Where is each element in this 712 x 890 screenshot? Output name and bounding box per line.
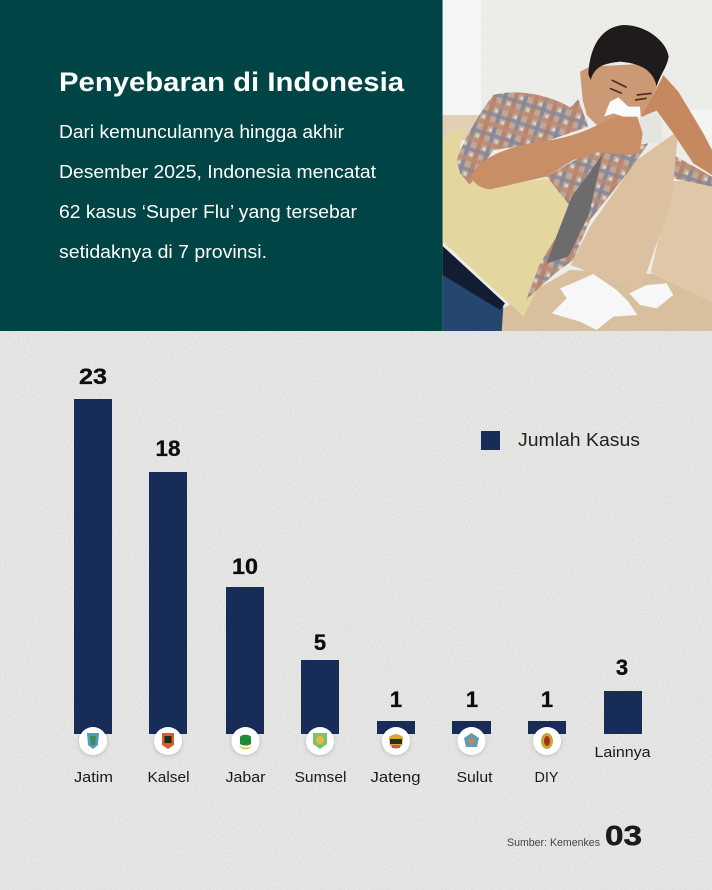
province emblem: Jatim [79, 727, 107, 755]
shirt right side [673, 155, 712, 187]
tissues on sofa [552, 274, 673, 330]
category labels: Lainnya [594, 744, 651, 761]
value labels: 23 [79, 364, 107, 389]
province emblem: DIY [533, 727, 561, 755]
bar chart [74, 364, 651, 786]
value labels: 1 [466, 687, 478, 712]
intro text: Desember 2025, Indonesia mencatat [59, 162, 376, 182]
tissue in hand [604, 97, 641, 117]
bar: Lainnya [604, 691, 642, 734]
legend: Jumlah Kasus [518, 430, 640, 450]
heading: Penyebaran di Indonesia [59, 67, 404, 97]
grey t-shirt [547, 154, 603, 263]
hair [588, 25, 669, 87]
bar: Jatim [74, 399, 112, 734]
province emblem: Jabar [232, 727, 260, 755]
bar: Kalsel [149, 472, 187, 734]
bar: Sulut [452, 721, 491, 734]
panel: header [0, 0, 443, 331]
bar: Jateng [377, 721, 415, 734]
category labels [74, 744, 651, 786]
yellow pillow [443, 127, 578, 317]
page number: 03 [605, 820, 642, 851]
forearm and hand [642, 75, 712, 175]
shirt torso [526, 143, 648, 300]
beige pillow [571, 131, 678, 292]
category labels: Jatim [74, 769, 113, 786]
province emblem: Kalsel [154, 727, 182, 755]
jeans [443, 275, 503, 331]
value labels: 18 [156, 436, 180, 461]
province emblem: Jateng [382, 727, 410, 755]
value labels: 3 [616, 655, 628, 680]
category labels: Kalsel [148, 769, 190, 786]
bar: DIY [528, 721, 566, 734]
category labels: Sulut [456, 769, 493, 786]
category labels: Jabar [226, 769, 266, 786]
category labels: Jateng [370, 769, 420, 786]
intro text: Dari kemunculannya hingga akhir [59, 122, 344, 142]
intro text [59, 122, 376, 262]
province emblem: Sulut [458, 727, 486, 755]
paper background [0, 331, 712, 890]
bar: Sumsel [301, 660, 339, 734]
photo: man with flu on sofa [442, 0, 712, 331]
value labels: 10 [232, 554, 258, 579]
category labels: DIY [534, 769, 558, 786]
value labels: 5 [314, 630, 326, 655]
value labels: 1 [390, 687, 402, 712]
province emblem: Sumsel [306, 727, 334, 755]
sofa [443, 115, 487, 140]
closed eyes [610, 80, 652, 100]
intro text: 62 kasus ‘Super Flu’ yang tersebar [59, 202, 357, 222]
shirt sleeve [457, 92, 588, 185]
arm [472, 113, 643, 189]
value labels: 1 [541, 687, 553, 712]
wall [443, 0, 712, 331]
bar: Jabar [226, 587, 264, 734]
source note: Sumber: Kemenkes [507, 837, 600, 849]
category labels: Sumsel [294, 769, 346, 786]
neck and face [580, 63, 657, 125]
value labels [79, 364, 628, 712]
intro text: setidaknya di 7 provinsi. [59, 242, 267, 262]
